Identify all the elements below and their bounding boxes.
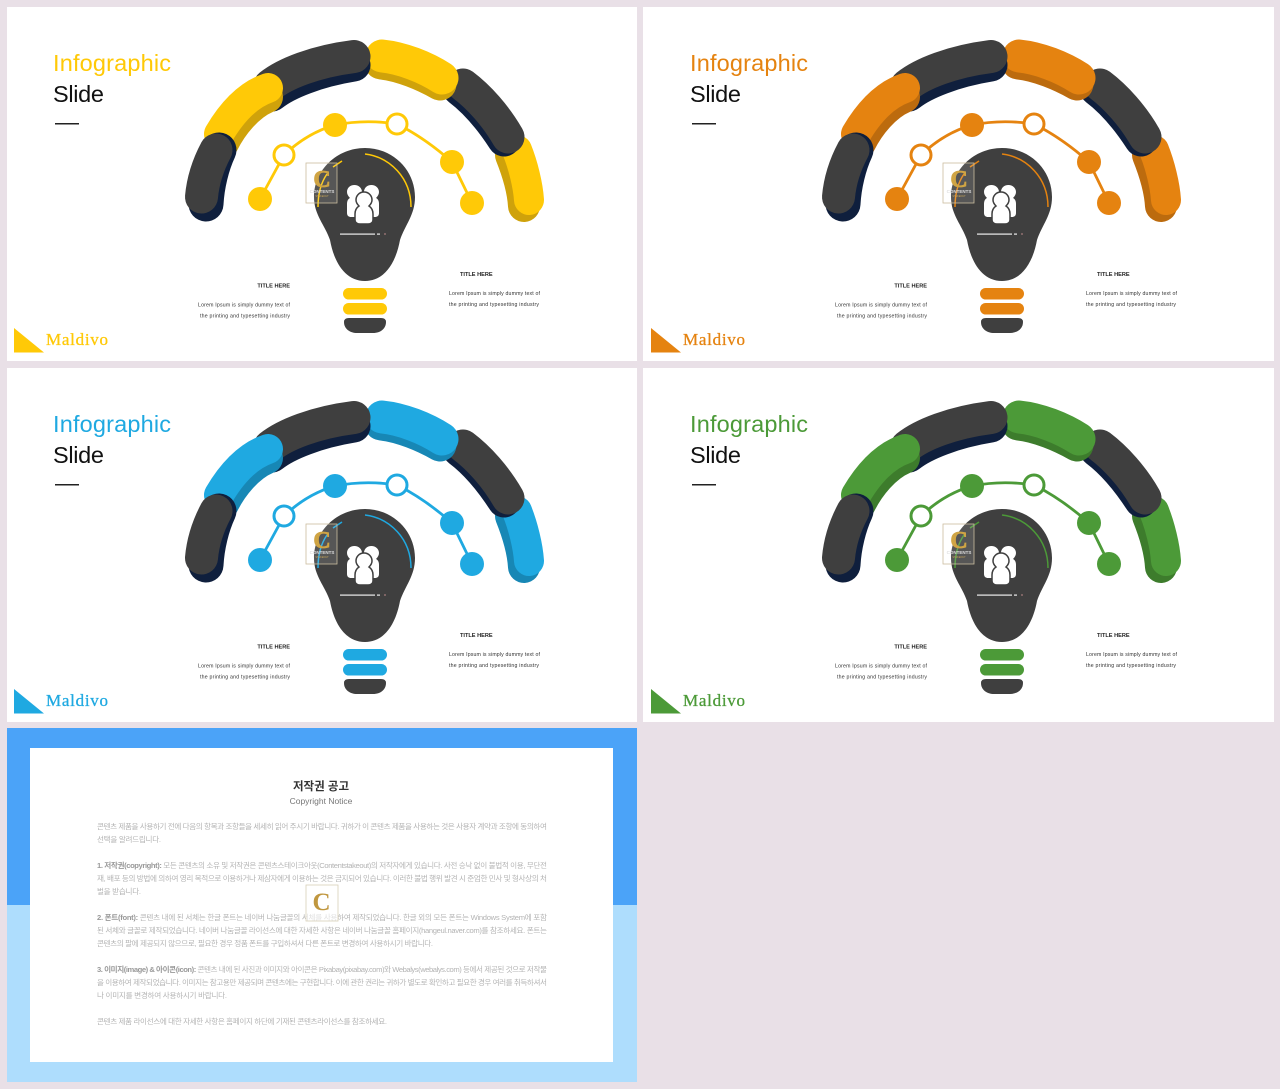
light bulb	[951, 509, 1052, 642]
heading: copyright notice	[290, 779, 353, 806]
text block: right	[1086, 633, 1178, 669]
text block: left: Lorem Ipsum is simply dummy text of	[835, 664, 928, 670]
brand logo: Maldivo	[46, 330, 108, 349]
text block: right: the printing and typesetting industry	[1086, 302, 1176, 308]
brand logo: Maldivo	[46, 691, 108, 710]
text block: footer note: 콘텐츠 제품 라이선스에 대한 자세한 사항은 홈페이지 하단에 기재된 콘텐츠라이선스를 참조하세요.	[97, 1016, 387, 1026]
slide title	[690, 411, 808, 486]
text block: right: Lorem Ipsum is simply dummy text of	[1086, 652, 1178, 658]
brand logo	[14, 689, 108, 714]
text block: left	[835, 284, 928, 320]
outer arch	[202, 417, 529, 567]
watermark logo: CONTENTS	[310, 550, 334, 555]
light bulb	[314, 148, 415, 281]
brand logo	[14, 328, 108, 352]
text block: right: Lorem Ipsum is simply dummy text of	[449, 291, 541, 297]
text block: intro	[97, 821, 547, 844]
watermark logo: CONTENTS	[947, 189, 971, 194]
panel: orange slide	[643, 7, 1274, 361]
text block: right: TITLE HERE	[1097, 633, 1130, 639]
text block: section 1: 재, 배포 등의 방법에 의하여 영리 목적으로 이용하거나 제삼자에게 이용하는 것은 금지되어 있습니다. 이러한 불법 행위 발견 시 준엄한 민사 및 형사상의 처	[97, 873, 547, 883]
text block: intro: 선택을 알려드립니다.	[97, 834, 161, 844]
text block: section 3: 을 이용하여 제작되었습니다. 이미지는 참고용만 제공되며 콘텐츠에는 구현합니다. 이에 관한 권리는 귀하가 별도로 확인하고 필요한 경우 여러를 취득하셔서	[97, 977, 547, 987]
text block: left	[198, 644, 291, 680]
slide title: Slide	[690, 442, 741, 468]
outer arch	[202, 56, 529, 206]
watermark logo: STAKEOUT	[315, 195, 329, 198]
panel: copyright notice	[7, 728, 637, 1082]
text block: section 3: 3. 이미지(image) & 아이콘(icon): 콘텐츠 내에 된 사진과 이미지와 아이콘은 Pixabay(pixabay.com)와 Webalys(webalys.com) 등에서 제공된 것으로 저작물	[97, 964, 547, 974]
watermark logo: C	[313, 528, 331, 554]
panel: green slide	[643, 368, 1274, 722]
watermark logo: CONTENTS	[947, 550, 971, 555]
heading: copyright notice: Copyright Notice	[290, 796, 353, 806]
text block: left: Lorem Ipsum is simply dummy text of	[835, 302, 928, 308]
text block: intro: 콘텐츠 제품을 사용하기 전에 다음의 항목과 조항들을 세세히 읽어 주시기 바랍니다. 귀하가 이 콘텐츠 제품을 사용하는 것은 사용자 계약과 조항에 동의하여	[97, 821, 547, 831]
text block: left: the printing and typesetting industry	[837, 314, 927, 320]
slide title: Infographic	[53, 411, 171, 437]
text block: right: the printing and typesetting industry	[449, 302, 539, 308]
watermark logo	[306, 885, 338, 921]
icon: people	[347, 546, 379, 585]
text block: right	[449, 272, 541, 308]
icon: people	[984, 546, 1016, 585]
panel: blue slide	[7, 368, 637, 722]
watermark logo	[306, 524, 337, 564]
inner dotted arc	[248, 474, 484, 576]
text block: right: TITLE HERE	[460, 633, 493, 639]
watermark logo: CONTENTS	[310, 189, 334, 194]
text block: left: TITLE HERE	[257, 284, 290, 290]
watermark logo: STAKEOUT	[952, 195, 966, 198]
text block: section 3: 나 이미지를 변경하여 사용하시기 바랍니다.	[97, 990, 227, 1000]
text block: left	[835, 644, 928, 680]
slide title	[53, 50, 171, 124]
brand logo	[651, 689, 745, 714]
light bulb	[314, 509, 415, 642]
heading: copyright notice: 저작권 공고	[293, 779, 349, 793]
text block: right	[449, 633, 541, 669]
bulb base	[980, 288, 1024, 333]
text block: section 2: 된 서체와 글꼴로 제작되었습니다. 네이버 나눔글꼴 라이선스에 대한 자세한 사항은 네이버 나눔글꼴 홈페이지(hangeul.naver.com)를 참조하세요. 폰트는	[97, 925, 547, 935]
text block: left: the printing and typesetting industry	[200, 674, 290, 680]
brand logo: Maldivo	[683, 691, 745, 710]
text block: right: Lorem Ipsum is simply dummy text of	[449, 652, 541, 658]
text block: section 1: 1. 저작권(copyright): 모든 콘텐츠의 소유 및 저작권은 콘텐츠스테이크아웃(Contentstakeout)의 저작자에게 있습니다. 사전 승낙 없이 불법적 이용, 무단전	[97, 860, 547, 870]
text block: right: Lorem Ipsum is simply dummy text of	[1086, 291, 1178, 297]
slide title	[690, 50, 808, 124]
watermark logo: C	[313, 167, 331, 193]
text block: left: TITLE HERE	[257, 644, 290, 650]
text block: right: the printing and typesetting industry	[449, 663, 539, 669]
brand logo: Maldivo	[683, 330, 745, 349]
text block: section 3	[97, 964, 547, 1000]
bulb base	[980, 649, 1024, 694]
text block: left: TITLE HERE	[894, 284, 927, 290]
inner dotted arc	[885, 474, 1121, 576]
watermark logo: C	[950, 528, 968, 554]
text block: section 1	[97, 860, 547, 896]
slide title: Infographic	[690, 411, 808, 437]
text block: left: the printing and typesetting industry	[200, 314, 290, 320]
outer arch	[838, 56, 1166, 206]
slide title: Slide	[53, 81, 104, 107]
text block: right	[1086, 272, 1178, 308]
text block: right: TITLE HERE	[1097, 272, 1130, 278]
icon: people	[984, 185, 1016, 224]
slide title: Infographic	[690, 50, 808, 76]
light bulb	[951, 148, 1052, 281]
text block: right: the printing and typesetting industry	[1086, 663, 1176, 669]
watermark logo: C	[312, 889, 331, 916]
watermark logo: STAKEOUT	[952, 556, 966, 559]
text block: section 2: 콘텐츠의 팔에 제공되지 않으므로, 필요한 경우 정품 폰트를 구입하셔서 다른 폰트로 변경하여 사용하시기 바랍니다.	[97, 938, 433, 948]
text block: left: Lorem Ipsum is simply dummy text of	[198, 302, 291, 308]
text block: section 1: 벌을 받습니다.	[97, 886, 141, 896]
slide title: Slide	[53, 442, 104, 468]
text block: section 2: 2. 폰트(font): 콘텐츠 내에 된 서체는 한글 폰트는 네이버 나눔글꼴의 서체를 사용하여 제작되었습니다. 한글 외의 모든 폰트는 Windows System에 포함	[97, 912, 547, 922]
bulb base	[343, 649, 387, 694]
text block: right: TITLE HERE	[460, 272, 493, 278]
slide title	[53, 411, 171, 486]
panel: yellow slide	[7, 7, 637, 361]
text block: left: the printing and typesetting industry	[837, 674, 927, 680]
inner dotted arc	[248, 113, 484, 215]
slide title: Infographic	[53, 50, 171, 76]
text block: left	[198, 284, 291, 320]
inner dotted arc	[885, 113, 1121, 215]
text block: left: TITLE HERE	[894, 644, 927, 650]
watermark logo: C	[950, 167, 968, 193]
bulb base	[343, 288, 387, 333]
watermark logo: STAKEOUT	[315, 556, 329, 559]
watermark logo	[943, 163, 974, 203]
text block: left: Lorem Ipsum is simply dummy text of	[198, 664, 291, 670]
slide title: Slide	[690, 81, 741, 107]
text block: section 2	[97, 912, 547, 948]
outer arch	[838, 417, 1166, 567]
watermark logo	[306, 163, 337, 203]
brand logo	[651, 328, 745, 352]
watermark logo	[943, 524, 974, 564]
icon: people	[347, 185, 379, 224]
